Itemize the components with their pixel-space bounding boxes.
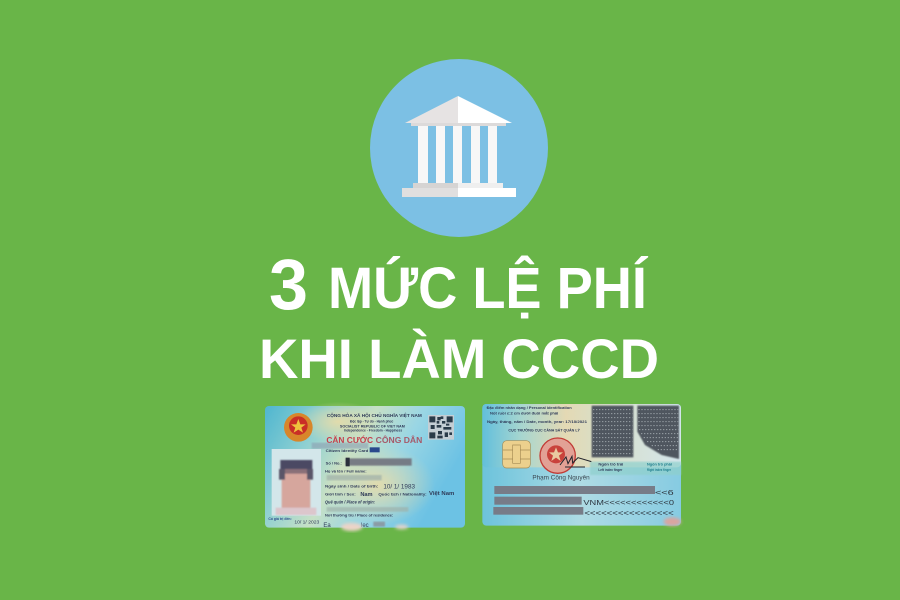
machine readable zone: VNM<<<<<<<<<<<<0 bbox=[583, 498, 674, 507]
fingerprint left bbox=[592, 406, 633, 457]
title: MỨC LỆ PHÍ bbox=[328, 256, 649, 321]
blurred strip bbox=[312, 443, 368, 449]
chip bbox=[503, 441, 530, 468]
personal details: Quê quán / Place of origin: bbox=[325, 500, 375, 505]
icon: bank building in circle bbox=[370, 59, 548, 237]
card header text: SOCIALIST REPUBLIC OF VIET NAM bbox=[340, 425, 405, 429]
id card front bbox=[265, 402, 465, 531]
personal details: Việt Nam bbox=[429, 491, 454, 497]
citizen identity label bbox=[326, 447, 380, 453]
personal details: Nam bbox=[360, 492, 373, 498]
id card back bbox=[482, 404, 681, 526]
issue details text: Đặc điểm nhân dạng / Personal identification bbox=[487, 405, 572, 410]
fingerprint labels: Right index finger bbox=[647, 468, 671, 472]
personal details bbox=[268, 468, 454, 529]
finger at corner bbox=[664, 517, 681, 526]
personal details: 10/ 1/ 1983 bbox=[383, 484, 415, 491]
id number blurred: Số / No.: bbox=[326, 460, 342, 465]
card title: CÔNG DÂN bbox=[376, 436, 423, 445]
personal details: Nơi thường trú / Place of residence: bbox=[325, 513, 393, 518]
personal details: lec bbox=[361, 523, 369, 529]
id number blurred bbox=[326, 458, 412, 466]
card header text bbox=[327, 411, 422, 433]
personal details: Họ và tên / Full name: bbox=[325, 468, 367, 473]
qr code bbox=[428, 415, 454, 440]
card title bbox=[326, 436, 423, 445]
issue details text bbox=[487, 405, 588, 433]
fingers bbox=[341, 523, 408, 531]
personal details: Có giá trị đến: bbox=[268, 517, 292, 521]
fingerprint labels: Left index finger bbox=[598, 468, 623, 472]
fingerprint right bbox=[637, 406, 679, 459]
card title: CĂN CƯỚC bbox=[326, 436, 373, 445]
machine readable zone bbox=[493, 486, 674, 517]
issue details text: Nốt ruồi c:2 cm dưới đuôi mắt phải bbox=[490, 410, 558, 415]
red seal bbox=[540, 438, 575, 473]
personal details: Ngày sinh / Date of birth: bbox=[325, 483, 378, 488]
citizen identity label: Citizen Identity Card bbox=[326, 448, 369, 453]
signer name: Phạm Công Nguyên bbox=[532, 475, 590, 482]
card header text: Independence - Freedom - Happiness bbox=[344, 429, 402, 433]
title bbox=[259, 246, 659, 390]
card header text: Độc lập - Tự do - Hạnh phúc bbox=[350, 418, 394, 423]
machine readable zone: <<6 bbox=[655, 488, 674, 497]
issue details text: Ngày, tháng, năm / Date, month, year: 17/10/2021 bbox=[487, 419, 588, 424]
fingerprint labels bbox=[598, 463, 672, 472]
issue details text: CỤC TRƯỞNG CỤC CẢNH SÁT QUẢN LÝ bbox=[508, 428, 580, 433]
personal details: Ea bbox=[323, 523, 331, 529]
personal details: 10/ 1/ 2023 bbox=[294, 520, 320, 525]
title: 3 bbox=[269, 246, 308, 325]
title: KHI LÀM CCCD bbox=[259, 327, 659, 390]
signature bbox=[560, 456, 591, 467]
fingerprint labels: Ngón trỏ phải bbox=[647, 463, 672, 467]
national emblem bbox=[284, 413, 313, 442]
card header text: CỘNG HÒA XÃ HỘI CHỦ NGHĨA VIỆT NAM bbox=[327, 411, 422, 418]
personal details: Quốc tịch / Nationality: bbox=[378, 492, 427, 497]
personal details: Giới tính / Sex: bbox=[325, 492, 356, 497]
fingerprint labels: Ngón trỏ trái bbox=[598, 463, 623, 467]
machine readable zone: <<<<<<<<<<<<<<<< bbox=[584, 508, 674, 517]
portrait photo bbox=[272, 449, 321, 516]
